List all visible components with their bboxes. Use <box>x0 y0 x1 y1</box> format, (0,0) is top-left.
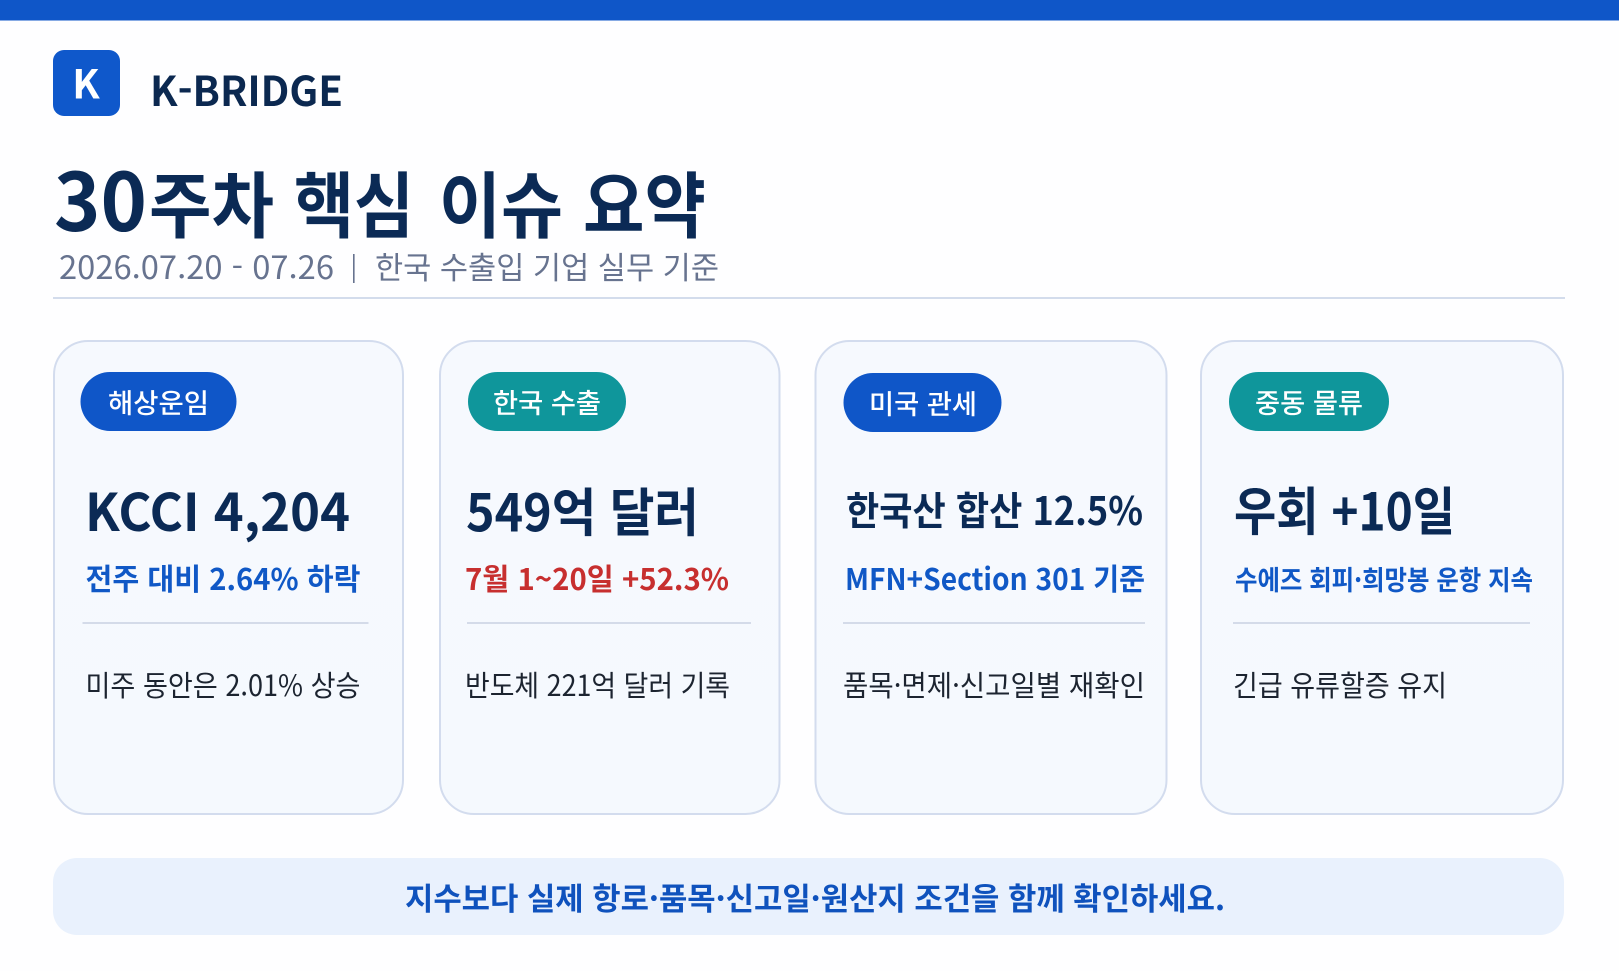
tag <box>844 373 1002 432</box>
tag: 한국 수출 <box>493 382 601 421</box>
change: 7월 1~20일 +52.3% <box>465 555 729 599</box>
note: 품목·면제·신고일별 재확인 <box>843 663 1145 705</box>
title: 핵심 <box>294 148 414 253</box>
tag: 미국 관세 <box>869 383 977 422</box>
tag: 해상운임 <box>108 382 209 421</box>
logo <box>53 50 343 118</box>
panel: 해상운임 <box>54 341 403 814</box>
top bar <box>0 0 1619 20</box>
title: 주차 <box>149 148 274 253</box>
panel: 미국 관세 <box>816 341 1166 814</box>
change: 전주 대비 2.64% 하락 <box>86 555 360 599</box>
tag <box>1229 372 1389 431</box>
title <box>54 139 706 255</box>
callout banner <box>53 858 1564 935</box>
panel: 중동 물류 <box>1201 341 1563 814</box>
subtitle: 한국 수출입 기업 실무 기준 <box>375 243 719 288</box>
change: 수에즈 회피·희망봉 운항 지속 <box>1235 559 1533 598</box>
icon: K logo mark <box>53 50 120 116</box>
headline value: 한국산 합산 12.5% <box>846 481 1143 537</box>
note: 반도체 221억 달러 기록 <box>465 663 730 705</box>
icon: K logo mark: K <box>72 52 100 110</box>
brand name: K-BRIDGE <box>150 58 343 118</box>
note: 긴급 유류할증 유지 <box>1233 663 1447 705</box>
subtitle: 2026.07.20 - 07.26 <box>59 243 334 289</box>
headline value: 549억 달러 <box>466 472 699 546</box>
subtitle <box>59 243 719 289</box>
title: 이슈 <box>439 148 563 253</box>
tag <box>468 372 626 431</box>
headline value: KCCI 4,204 <box>85 471 350 546</box>
headline value: 우회 +10일 <box>1234 470 1455 546</box>
title: 요약 <box>583 148 706 253</box>
callout banner: 지수보다 실제 항로·품목·신고일·원산지 조건을 함께 확인하세요. <box>405 874 1225 919</box>
tag: 중동 물류 <box>1255 382 1363 421</box>
tag <box>80 372 236 431</box>
title: 30 <box>54 139 147 255</box>
panel: 한국 수출 <box>440 341 780 814</box>
note: 미주 동안은 2.01% 상승 <box>86 663 360 705</box>
change: MFN+Section 301 기준 <box>845 555 1145 599</box>
